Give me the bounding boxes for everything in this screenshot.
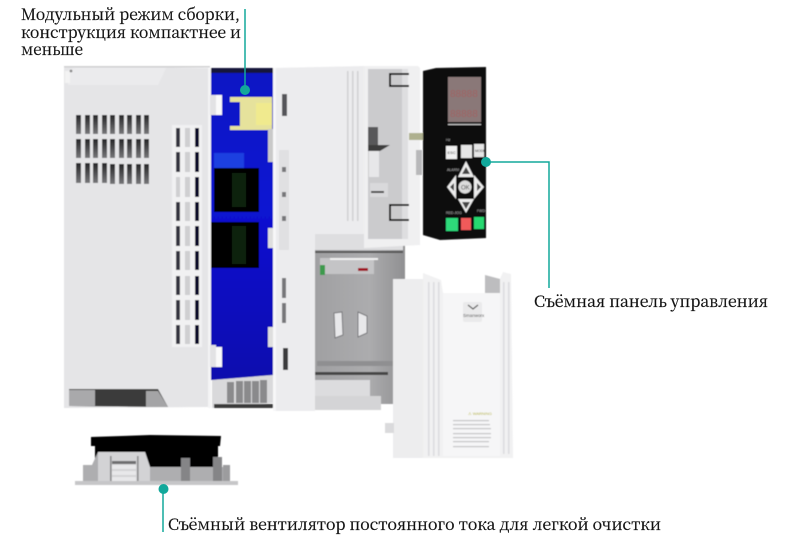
label text: Съёмная панель управления — [534, 289, 768, 312]
run stop buttons: RED-JOG — [446, 211, 462, 215]
middle housing — [273, 66, 364, 411]
callout: compact modular design: конструкция компактнее и — [21, 20, 241, 43]
display: 88888 — [450, 89, 478, 100]
function buttons: ESC — [448, 150, 456, 155]
converter assembly — [64, 66, 513, 458]
run stop buttons — [446, 209, 485, 231]
display — [448, 77, 481, 125]
leader line right — [486, 162, 549, 288]
display: 88888 — [450, 109, 478, 120]
callout: compact modular design: меньше — [21, 37, 83, 60]
brand logo — [463, 302, 485, 322]
callout: removable fan — [158, 484, 661, 535]
terminal block — [212, 375, 273, 408]
bottom foot recess — [69, 389, 168, 407]
side slot panel — [172, 125, 202, 347]
open door compartment — [364, 66, 423, 248]
door hinge bracket lower — [390, 205, 409, 220]
direction pad — [447, 161, 484, 213]
label text: Модульный режим сборки, — [21, 2, 240, 25]
yellow component — [230, 97, 272, 130]
top vent grid — [76, 115, 149, 184]
function buttons — [446, 138, 486, 159]
callout: removable control panel — [481, 157, 768, 312]
front cover removed — [385, 272, 513, 458]
brand logo: Smanworx — [463, 313, 485, 318]
direction pad: ALARM — [447, 168, 459, 172]
direction pad: OK — [461, 186, 470, 192]
warning label: ⚠ WARNING — [468, 411, 492, 416]
left side housing — [64, 66, 222, 408]
lower interior bay — [315, 234, 405, 410]
function buttons: Hz — [446, 138, 451, 142]
control panel keypad — [423, 67, 486, 240]
warning label — [453, 411, 492, 447]
circuit board interior — [209, 68, 275, 408]
removable DC fan — [75, 435, 238, 485]
terminal strip — [320, 258, 378, 275]
run stop buttons: FWD — [477, 209, 485, 213]
leader line top — [244, 9, 246, 90]
door hinge bracket upper — [390, 74, 409, 86]
callout: compact modular design — [21, 2, 250, 95]
black relay upper — [214, 168, 259, 212]
function buttons: MODE — [475, 149, 486, 153]
leader line bottom — [162, 489, 164, 532]
label text: Съёмный вентилятор постоянного тока для легкой очистки — [168, 512, 661, 535]
mounting clips — [334, 312, 367, 338]
black relay lower — [210, 222, 259, 268]
